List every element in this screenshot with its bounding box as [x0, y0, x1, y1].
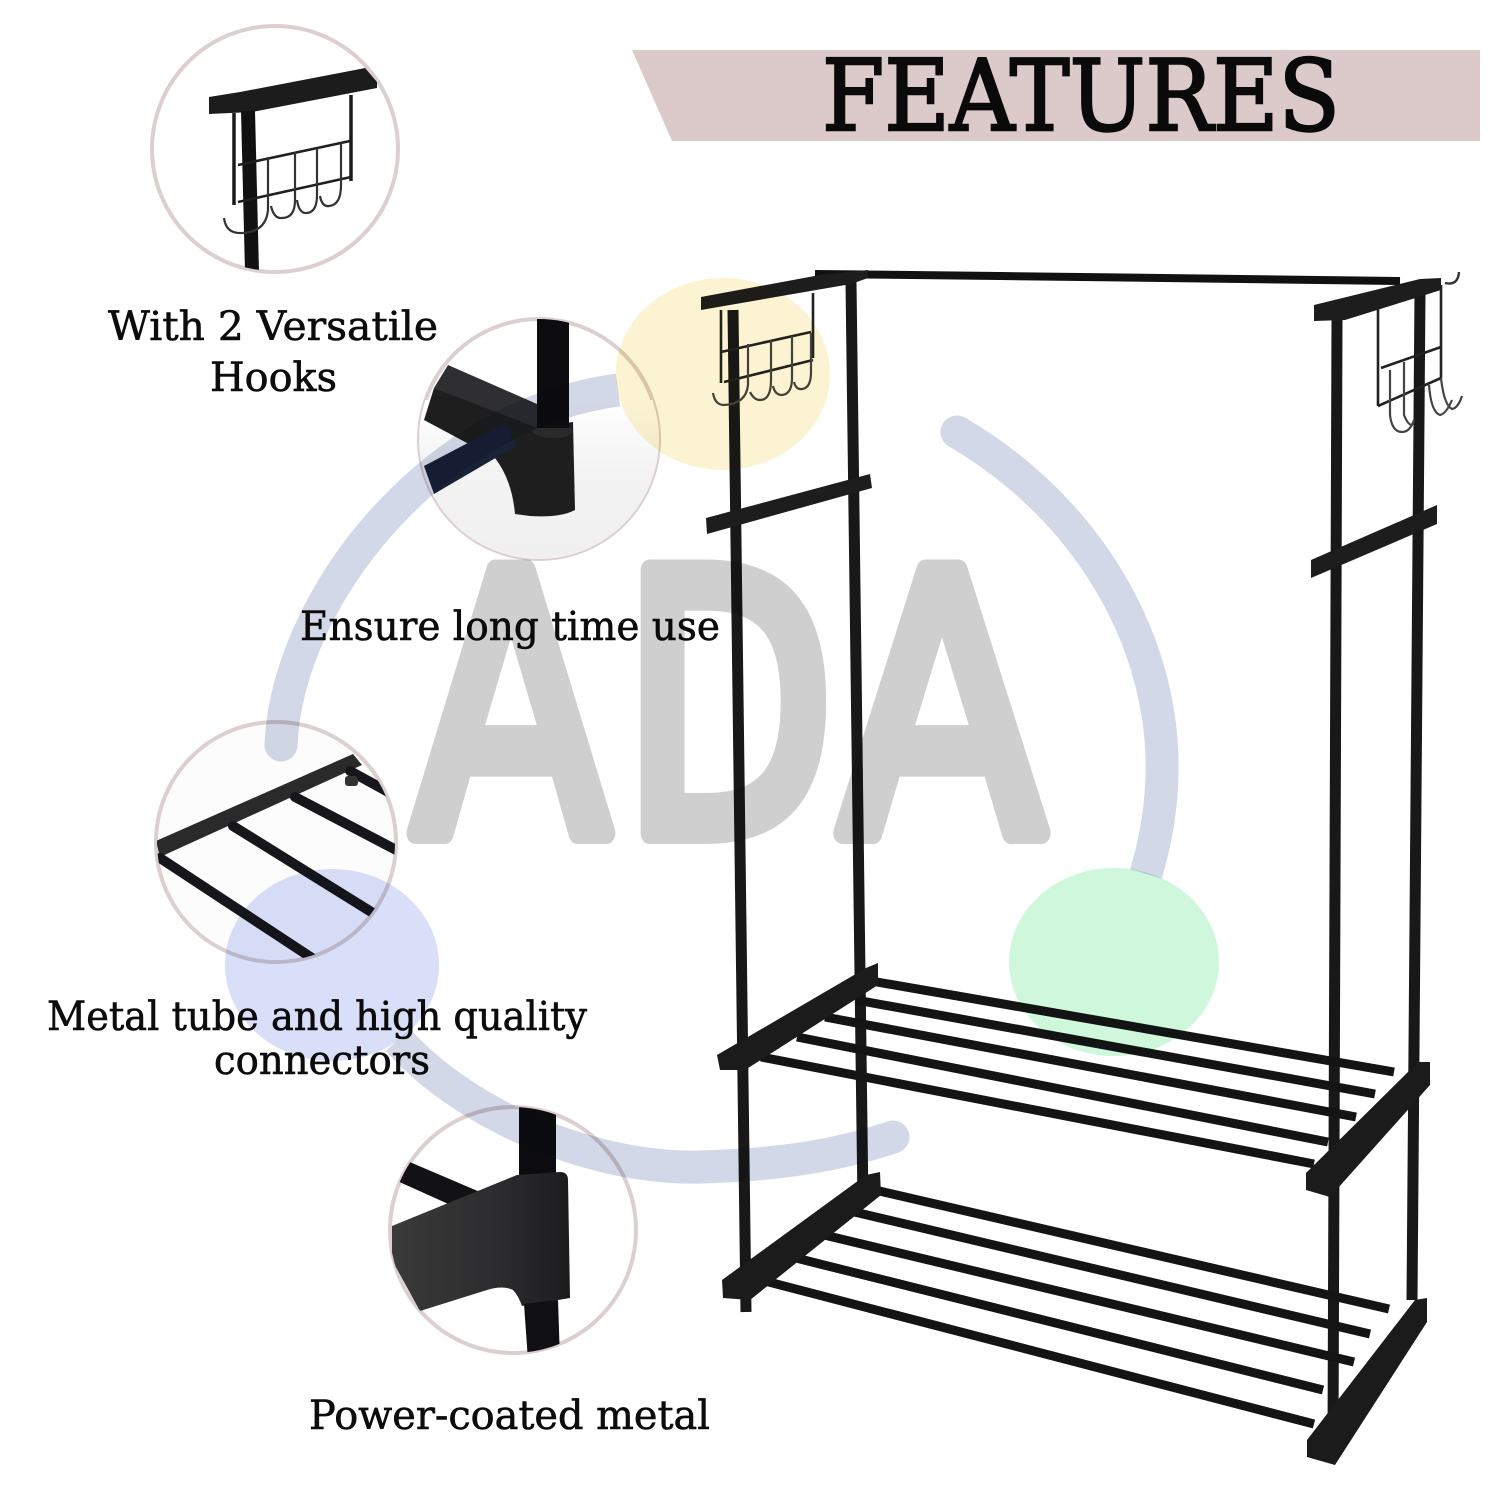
- accent circle: blue: [225, 869, 439, 1061]
- caption: with 2 versatile hooks: Hooks: [210, 355, 337, 401]
- left hook basket: [713, 293, 813, 405]
- watermark letters: D: [622, 499, 834, 918]
- photo circle: hooks detail: [152, 26, 398, 272]
- caption: ensure long time use: Ensure long time use: [300, 604, 720, 650]
- photo circle: powder-coated metal detail: [390, 1100, 636, 1360]
- accent circle: green: [1009, 868, 1219, 1056]
- watermark letters: [413, 499, 1045, 918]
- top rail: [815, 274, 1400, 281]
- right hook basket: [1378, 272, 1462, 432]
- garment rack illustration: [701, 270, 1462, 1465]
- watermark ring: [264, 390, 1162, 1167]
- watermark letters: A: [840, 499, 1045, 918]
- rack posts: [733, 282, 1420, 1440]
- caption: metal tube and high quality connectors: connectors: [214, 1038, 430, 1084]
- caption: with 2 versatile hooks: With 2 Versatile: [108, 304, 438, 350]
- watermark logo: [264, 390, 1162, 1167]
- title banner: FEATURES: [822, 40, 1340, 154]
- watermark letters: A: [413, 499, 610, 918]
- photo circle: metal tube detail: [156, 722, 400, 962]
- caption: with 2 versatile hooks: [108, 304, 438, 401]
- accent circle: yellow: [616, 278, 830, 470]
- middle shelf: [717, 963, 1430, 1197]
- title banner: [632, 40, 1480, 154]
- bottom shelf: [722, 1172, 1427, 1465]
- photo circle: connector joint detail: [419, 315, 660, 560]
- caption: power-coated metal: Power-coated metal: [309, 1393, 710, 1439]
- caption: metal tube and high quality connectors: [47, 994, 587, 1084]
- caption: metal tube and high quality connectors: Metal tube and high quality: [47, 994, 587, 1040]
- upper cross bars: [701, 270, 1441, 578]
